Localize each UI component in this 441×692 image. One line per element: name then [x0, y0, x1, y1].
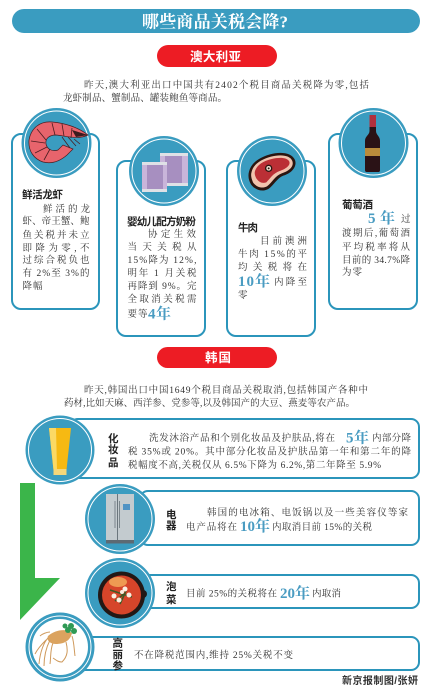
- text: lobster: 鲜活的龙: [43, 203, 90, 215]
- heading: wine: 葡萄酒: [342, 198, 374, 211]
- label: cosmetics: 妆: [108, 443, 119, 456]
- text: kimchi: 内取消: [312, 588, 341, 600]
- text: cosmetics: [128, 428, 411, 471]
- label: cosmetics: 品: [108, 457, 118, 469]
- text: kimchi: 目前 25%的关税将在: [186, 588, 277, 600]
- text: beef: [238, 235, 307, 301]
- text: infant formula: 明年 1 月关税: [128, 267, 197, 279]
- panel: kimchi: [85, 558, 419, 628]
- text: lobster: [22, 203, 90, 292]
- text: wine: 5 年: [368, 209, 395, 227]
- text: infant formula: 当天关税从: [128, 241, 197, 253]
- heading: Korea: 韩国: [205, 350, 231, 365]
- text: beef: 零: [238, 290, 248, 301]
- text: ginseng: 不在降税范围内,维持 25%关税不变: [134, 649, 293, 661]
- icon: formula cans: [129, 136, 199, 206]
- text: wine: 渡期后,葡萄酒: [342, 227, 410, 239]
- text: lobster: 降幅: [22, 280, 43, 292]
- heading: Korea: [157, 347, 277, 368]
- text: wine: 为零: [342, 266, 362, 278]
- text: appliances: 内取消目前 15%的关税: [272, 521, 372, 533]
- credit: 新京报制图/张妍: [342, 674, 418, 687]
- icon: refrigerator: [85, 484, 155, 554]
- text: cosmetics: 税幅度不高,关税仅从 6.5%下降为 6.2%,第二年降至 5.9%: [128, 459, 381, 471]
- panel: infant formula: [117, 136, 205, 336]
- icon: lobster: [22, 108, 92, 178]
- text: lobster: 过综合税负也: [22, 254, 90, 266]
- panel: lobster: [12, 108, 99, 309]
- heading: infant formula: 婴幼儿配方奶粉: [127, 215, 196, 228]
- text: appliances: [186, 506, 408, 535]
- text: wine: 过: [401, 213, 411, 225]
- intro text: Korea: 昨天,韩国出口中国1649个税目商品关税取消,包括韩国产各种中: [84, 384, 368, 396]
- text: appliances: 10年: [240, 517, 270, 535]
- text: wine: 平均税率将从: [342, 241, 410, 253]
- text: beef: 目前澳洲: [260, 235, 307, 247]
- label: cosmetics: 化: [108, 432, 119, 445]
- icon: cosmetic tube: [26, 416, 94, 484]
- text: beef: 10年: [238, 272, 270, 290]
- arrow: green downward: [20, 483, 60, 620]
- text: wine: 目前的 34.7%降: [342, 254, 410, 266]
- text: lobster: 虾、帝王蟹、鲍: [22, 215, 90, 227]
- label: ginseng: 参: [112, 659, 124, 672]
- text: infant formula: 再降到 9%。完: [128, 280, 197, 292]
- text: kimchi: 20年: [280, 584, 310, 602]
- heading: Australia: 澳大利亚: [190, 49, 241, 64]
- label: ginseng: 丽: [112, 649, 124, 661]
- label: appliances: 电: [166, 508, 177, 521]
- text: lobster: 鱼关税并未立: [22, 229, 90, 241]
- text: infant formula: 4年: [148, 304, 171, 322]
- intro text: Korea: 药材,比如天麻、西洋参、党参等,以及韩国产的大豆、燕麦等农产品。: [64, 397, 355, 409]
- icon: wine bottle: [338, 108, 408, 178]
- text: cosmetics: 5年: [346, 428, 369, 446]
- panel: cosmetics: [26, 416, 419, 484]
- panel: beef: [227, 136, 315, 336]
- heading: lobster: 鲜活龙虾: [22, 188, 64, 201]
- icon: kimchi soup: [85, 558, 155, 628]
- text: cosmetics: 内部分降: [372, 432, 411, 444]
- panel: appliances: [85, 484, 419, 554]
- label: cosmetics: [108, 432, 119, 469]
- label: kimchi: 泡: [166, 580, 177, 593]
- panel: ginseng: [26, 612, 419, 682]
- title banner: [12, 9, 420, 33]
- label: kimchi: 菜: [166, 593, 177, 606]
- intro text: Australia: [63, 79, 369, 104]
- label: kimchi: [166, 580, 177, 606]
- text: lobster: 即降为零,不: [22, 242, 90, 254]
- label: appliances: 器: [166, 520, 177, 532]
- intro text: Australia: 昨天,澳大利亚出口中国共有2402个税目商品关税降为零,包括: [84, 79, 369, 91]
- text: appliances: 韩国的电冰箱、电饭锅以及一些美容仪等家: [207, 506, 408, 518]
- label: ginseng: [112, 636, 124, 672]
- text: infant formula: 15%降为 12%,: [128, 254, 196, 266]
- text: cosmetics: 税 35%或 20%。其中部分化妆品及护肤品第一年和第二年的降: [128, 446, 411, 458]
- text: infant formula: [128, 228, 197, 322]
- intro text: Australia: 龙虾制品、蟹制品、罐装鲍鱼等商品。: [63, 92, 227, 104]
- text: infant formula: 协定生效: [148, 228, 196, 240]
- text: appliances: 电产品将在: [186, 521, 237, 533]
- text: kimchi: [186, 584, 341, 602]
- text: beef: 牛肉 15%的平: [238, 248, 307, 260]
- text: beef: 均关税将在: [238, 261, 307, 273]
- icon: ginseng: [26, 612, 94, 682]
- text: beef: 内降至: [274, 276, 307, 288]
- label: ginseng: 高: [112, 636, 123, 650]
- text: wine: [342, 209, 411, 278]
- text: infant formula: 全取消关税需: [128, 293, 197, 305]
- heading: beef: 牛肉: [238, 221, 258, 234]
- panel: wine: [329, 108, 417, 309]
- title banner: 哪些商品关税会降?: [142, 12, 288, 32]
- label: appliances: [166, 508, 177, 532]
- text: cosmetics: 洗发沐浴产品和个别化妆品及护肤品,将在: [149, 432, 335, 444]
- heading: Australia: [157, 45, 277, 67]
- text: lobster: 有 2%至 3%的: [22, 267, 90, 279]
- intro text: Korea: [64, 384, 368, 409]
- text: infant formula: 要等: [128, 308, 148, 320]
- icon: beef steak: [237, 136, 307, 206]
